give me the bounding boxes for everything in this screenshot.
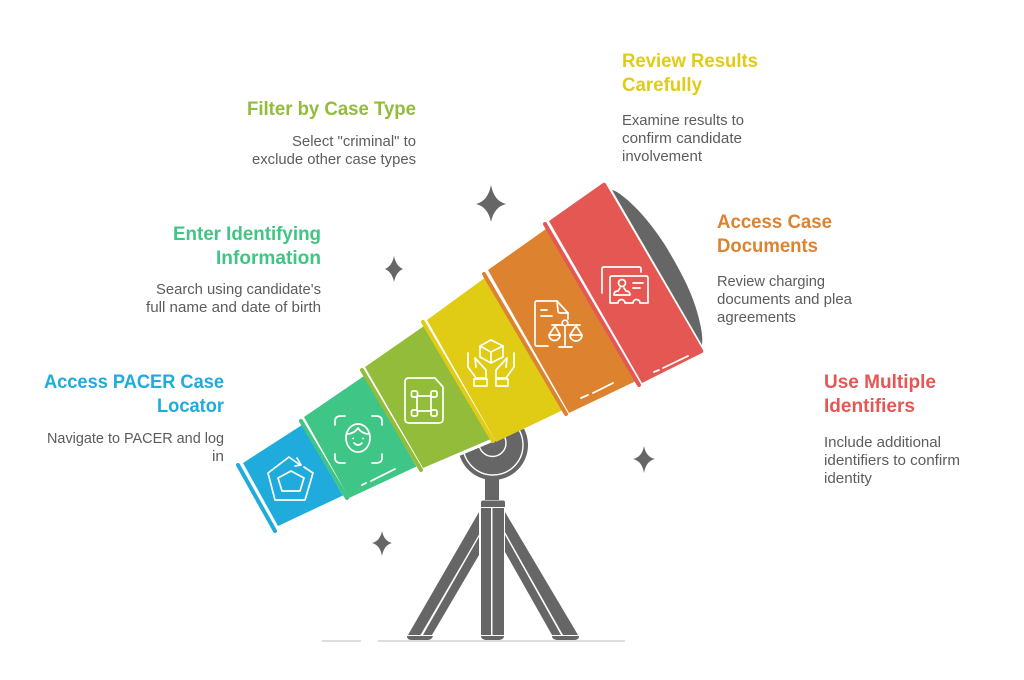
segment: olive [362, 326, 491, 470]
text: Use Multiple Identifiers: identifiers to confirm [824, 453, 960, 469]
text: Enter Identifying Information: Information [216, 248, 321, 269]
mount stem [485, 479, 499, 500]
text: Access Case Documents: agreements [717, 310, 796, 326]
text: Access Case Documents [717, 212, 853, 326]
icon: face scan [335, 416, 382, 463]
text: Use Multiple Identifiers [824, 372, 960, 487]
icon: pentagon with arrow [268, 457, 313, 500]
mount disc [458, 410, 528, 480]
text: Access PACER Case Locator: in [212, 449, 224, 465]
text: Enter Identifying Information: full name and date of birth [146, 300, 321, 316]
dash marks [654, 356, 688, 372]
text: Use Multiple Identifiers: Identifiers [824, 396, 915, 417]
text: Access Case Documents: Review charging [717, 274, 825, 290]
telescope tube [238, 183, 703, 531]
icon: identity cards [602, 267, 648, 303]
tripod and mount [407, 410, 579, 640]
text: Filter by Case Type: Filter by Case Type [247, 99, 416, 120]
text: Use Multiple Identifiers: Use Multiple [824, 372, 936, 393]
star: large top [476, 185, 506, 222]
text: Enter Identifying Information: Enter Identifying [173, 224, 321, 245]
text: Filter by Case Type: Select "criminal" to [292, 134, 416, 150]
text: Review Results Carefully: involvement [622, 149, 702, 165]
text: Filter by Case Type: exclude other case types [252, 152, 416, 168]
text: Use Multiple Identifiers: identity [824, 471, 873, 487]
tube backing [237, 182, 704, 532]
text: Review Results Carefully: Carefully [622, 75, 702, 96]
text: Enter Identifying Information: Search using candidate's [156, 282, 321, 298]
ground line [322, 640, 625, 642]
text: Review Results Carefully: Examine results to [622, 113, 744, 129]
icon: document with scales [535, 301, 582, 347]
star: left [385, 256, 403, 282]
text: Access Case Documents: Documents [717, 236, 818, 257]
text: Review Results Carefully: confirm candidate [622, 131, 742, 147]
text: Enter Identifying Information [146, 224, 321, 316]
star: right [633, 446, 655, 473]
text: Review Results Carefully [622, 51, 758, 165]
segment: yellow [423, 277, 563, 442]
dash marks [581, 383, 613, 398]
text: Access PACER Case Locator: Locator [157, 396, 225, 417]
text: Access PACER Case Locator: Navigate to PACER and log [47, 431, 224, 447]
tripod centre leg [481, 500, 505, 640]
text: Access Case Documents: documents and plea [717, 292, 853, 308]
icon: hands holding box [468, 340, 514, 386]
segment: orange [484, 229, 636, 414]
text: Review Results Carefully: Review Results [622, 51, 758, 72]
tripod left leg [407, 512, 479, 640]
segment: red [545, 183, 703, 385]
text: Access PACER Case Locator: Access PACER Case [44, 372, 224, 393]
text: Access PACER Case Locator [44, 372, 225, 465]
text: Filter by Case Type [247, 99, 416, 168]
star: bottom [372, 531, 392, 556]
text: Access Case Documents: Access Case [717, 212, 832, 233]
tripod right leg [505, 512, 579, 640]
text: Use Multiple Identifiers: Include additional [824, 435, 941, 451]
icon: file with selection square [405, 378, 443, 423]
dash marks [362, 469, 395, 485]
segment: blue [238, 425, 343, 531]
telescope lens [612, 190, 702, 345]
segment: green [301, 376, 416, 498]
